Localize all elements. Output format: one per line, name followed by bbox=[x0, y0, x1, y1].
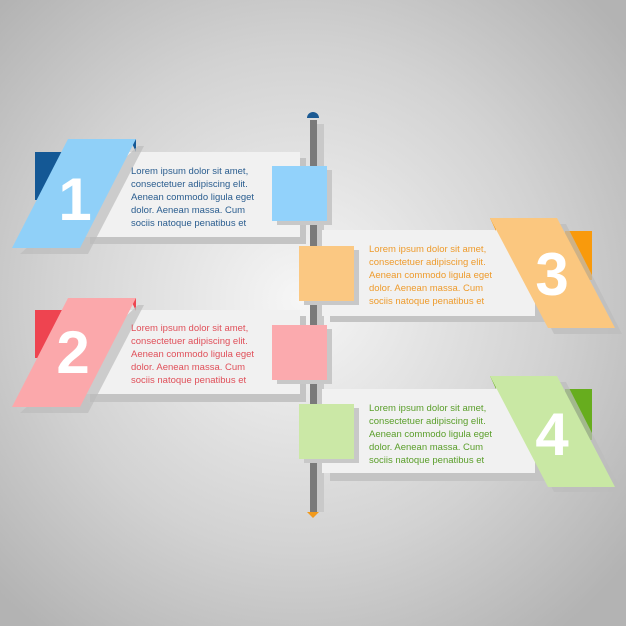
panel 4: Lorem ipsum dolor sit amet, bbox=[369, 403, 486, 414]
panel 2: dolor. Aenean massa. Cum bbox=[131, 362, 245, 373]
panel 2: Aenean commodo ligula eget bbox=[131, 349, 254, 360]
panel 2: consectetuer adipiscing elit. bbox=[131, 336, 248, 347]
panel 4: dolor. Aenean massa. Cum bbox=[369, 442, 483, 453]
panel 2: Lorem ipsum dolor sit amet, bbox=[131, 323, 248, 334]
panel 3: consectetuer adipiscing elit. bbox=[369, 257, 486, 268]
timeline line bbox=[307, 112, 324, 518]
panel 2: sociis natoque penatibus et bbox=[131, 375, 246, 386]
panel 3 bbox=[299, 218, 622, 334]
panel 1: dolor. Aenean massa. Cum bbox=[131, 205, 245, 216]
panel 4: sociis natoque penatibus et bbox=[369, 455, 484, 466]
panel 4 bbox=[299, 376, 622, 492]
panel 1: 1 bbox=[58, 166, 92, 233]
panel 4: 4 bbox=[535, 401, 569, 468]
panel 4: Aenean commodo ligula eget bbox=[369, 429, 492, 440]
panel 1: Lorem ipsum dolor sit amet, bbox=[131, 166, 248, 177]
panel 3: dolor. Aenean massa. Cum bbox=[369, 283, 483, 294]
panel 2: 2 bbox=[56, 319, 90, 386]
panel 3: Aenean commodo ligula eget bbox=[369, 270, 492, 281]
panel 3: sociis natoque penatibus et bbox=[369, 296, 484, 307]
panel 1: Aenean commodo ligula eget bbox=[131, 192, 254, 203]
panel 3: Lorem ipsum dolor sit amet, bbox=[369, 244, 486, 255]
panel 3: 3 bbox=[535, 241, 569, 308]
panel 1 bbox=[12, 139, 332, 254]
panel 2 bbox=[12, 298, 332, 413]
panel 4: consectetuer adipiscing elit. bbox=[369, 416, 486, 427]
panel 1: consectetuer adipiscing elit. bbox=[131, 179, 248, 190]
panel 1: sociis natoque penatibus et bbox=[131, 218, 246, 229]
